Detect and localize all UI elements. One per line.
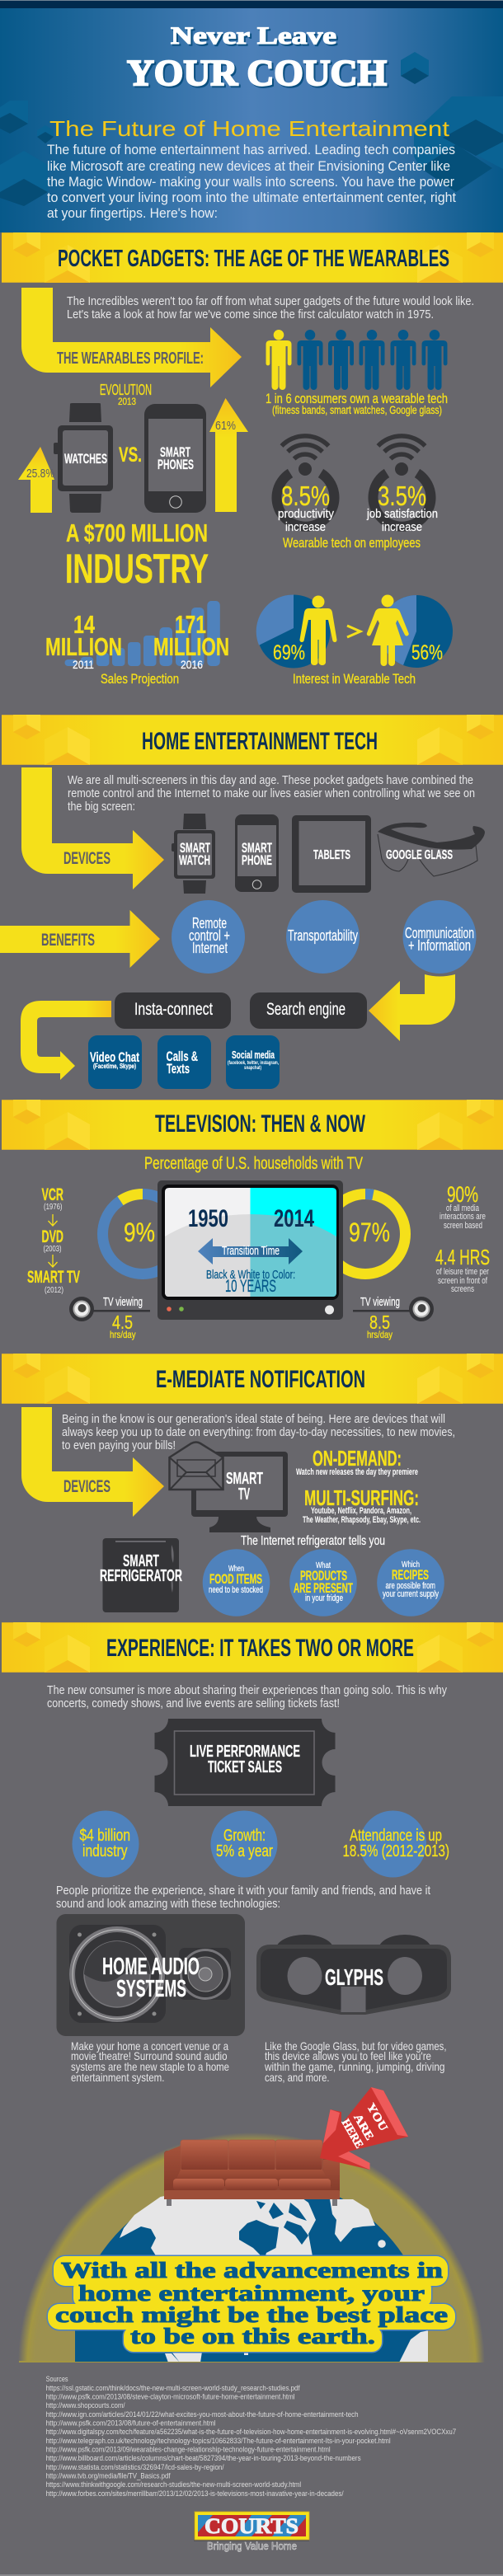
timeline: vcr dvd smart tv: (1976) (44, 1203, 63, 1212)
stat: 90% screen based: screen based (444, 1221, 482, 1231)
intro text: the Magic Window- making your walls into screens. You have the power (47, 174, 454, 190)
icon: smart tv monitor (191, 1452, 288, 1532)
circle: food items (203, 1549, 270, 1616)
timeline: vcr dvd smart tv: (2012) (45, 1286, 63, 1295)
icon: ticket: TICKET SALES (208, 1758, 282, 1776)
stat: 1 in 6 consumers (266, 391, 448, 416)
callout: best place on earth: With all the advancements in (61, 2258, 443, 2283)
text: new consumer: concerts, comedy shows, and live events are selling tickets fast! (47, 1696, 340, 1710)
label: evolution 2013: 2013 (118, 396, 136, 407)
section heading: home entertainment tech: HOME ENTERTAINMENT TECH (142, 728, 378, 755)
label: black and white to color: Black & White to Color: (206, 1268, 295, 1282)
stat: tv viewing 4.5 hrs: 4.5 (112, 1311, 133, 1333)
text: sources: http://www.billboard.com/articles/columns/chart-beat/5827394/the-year-in-touring-2013-beyond-the-numbers (46, 2454, 361, 2463)
arrow: you are here: YOU (364, 2101, 389, 2133)
stat: 90% screen based (440, 1182, 486, 1231)
stat: tv viewing 8.5 hrs: 8.5 (369, 1311, 390, 1333)
panel: header (0, 0, 503, 232)
circle: food items: need to be stocked (209, 1585, 263, 1595)
stat: tv viewing 4.5 hrs: TV viewing (103, 1295, 143, 1309)
circle: food items: FOOD ITEMS (209, 1571, 262, 1587)
icon: wifi job satisfaction 3.5%: 3.5% (378, 481, 426, 511)
text: multi-screeners: the big screen: (68, 800, 135, 814)
bar chart: sales projection: 171 (175, 610, 206, 639)
arrow: 25.8% (18, 447, 54, 513)
bar chart: sales projection: Sales Projection (101, 671, 179, 687)
card: calls and texts (157, 1035, 211, 1089)
bar chart: sales projection: MILLION (45, 632, 122, 661)
timeline: vcr dvd smart tv: SMART TV (27, 1268, 80, 1287)
icon: watch (54, 403, 113, 513)
headline: 700 million industry (65, 518, 209, 592)
arrow: 25.8%: 25.8% (26, 467, 54, 481)
circle: remote control + internet: Internet (192, 940, 228, 956)
intro text: The future of home entertainment has arrived. Leading tech companies (47, 142, 455, 157)
icon: tablet: TABLETS (313, 848, 350, 862)
icon: wifi productivity 8.5%: 8.5% (281, 481, 330, 511)
card: social media: Social media (232, 1049, 275, 1061)
icon: home audio speakers (56, 1914, 245, 2036)
bar chart: sales projection: MILLION (153, 632, 229, 661)
text: being in the know: to even paying your bills! (62, 1438, 176, 1452)
icon: wifi job satisfaction 3.5% (366, 436, 438, 534)
card: video chat: Video Chat (90, 1049, 139, 1065)
icon: smart tv monitor: TV (238, 1485, 250, 1504)
text: sources: http://www.statista.com/statistics/326947/lcd-sales-by-region/ (46, 2463, 224, 2472)
stat: tv viewing 4.5 hrs: hrs/day (110, 1329, 135, 1340)
text: sources: http://www.tvb.org/media/file/TV_Basics.pdf (46, 2471, 171, 2481)
card: social media: snapchat) (244, 1066, 261, 1071)
icon: wifi job satisfaction 3.5%: increase (382, 520, 422, 534)
text: sources: http://www.telegraph.co.uk/technology/technology-topics/10662833/The-future-of-entertainment-Its-in-your-pocket.html (46, 2437, 391, 2446)
circle: recipes: are possible from (386, 1581, 435, 1591)
text: concert venue (71, 2039, 229, 2084)
logo: courts: Bringing Value Home (207, 2540, 297, 2552)
icon: smart refrigerator: REFRIGERATOR (100, 1567, 182, 1585)
stat: tv viewing 4.5 hrs (69, 1295, 150, 1340)
stat: 90% screen based: of all media (446, 1204, 480, 1213)
stat: 1 in 6 consumers: (fitness bands, smart watches, Google glass) (272, 403, 442, 416)
intro text: to convert your living room into the ultimate entertainment center, right (47, 190, 456, 205)
text: concert venue: entertainment system. (71, 2071, 165, 2084)
circle: 4 billion industry (73, 1810, 139, 1878)
text: sources: Sources (46, 2375, 68, 2384)
text: video games: cars, and more. (265, 2071, 330, 2084)
title (127, 22, 387, 93)
circle: transportability (286, 900, 360, 974)
text: sources: http://www.psfk.com/2013/08/future-of-entertainment.html (46, 2419, 216, 2428)
circle: products are present: ARE PRESENT (294, 1580, 353, 1596)
icon: smartphone (144, 404, 206, 513)
stat: tv viewing 8.5 hrs (353, 1295, 434, 1340)
circle: transportability: Transportability (288, 927, 358, 944)
card: social media: (facebook, twitter, instagram, (228, 1061, 279, 1066)
circle: growth: 5% a year (216, 1842, 273, 1860)
donut chart: 9% in 1950: 9% (124, 1218, 155, 1247)
text: on-demand: ON-DEMAND: (313, 1446, 402, 1471)
icon: wifi productivity 8.5%: productivity (278, 507, 334, 521)
text: being in the know (62, 1412, 455, 1452)
bar chart: sales projection: 14 (73, 610, 96, 639)
circle: communication + information: + Information (408, 937, 471, 954)
icon: smart tv monitor: SMART (226, 1470, 263, 1488)
text: new consumer (47, 1683, 447, 1710)
logo: courts (194, 2512, 309, 2552)
section heading: experience (2, 1622, 503, 1673)
donut chart: 9% in 1950 (102, 1194, 183, 1274)
headline: 700 million industry: A $700 MILLION (66, 518, 208, 547)
arrow: you are here: ARE (350, 2112, 375, 2142)
icon: home audio speakers: SYSTEMS (116, 1976, 186, 2002)
timeline: vcr dvd smart tv: (2003) (43, 1245, 61, 1254)
icon: smart refrigerator: SMART (123, 1552, 159, 1570)
section heading: television then and now: TELEVISION: THEN & NOW (155, 1110, 365, 1138)
icon: home audio speakers: HOME AUDIO (102, 1954, 200, 1980)
arrow: insta-connect to apps (21, 1001, 111, 1080)
icon: wifi productivity 8.5% (277, 436, 335, 534)
circle: food items: When (228, 1565, 244, 1574)
icon: smart phone (235, 814, 279, 892)
icon: smart watch: SMART (180, 840, 210, 856)
caption: interest in wearable tech: Interest in Wearable Tech (293, 671, 416, 687)
section heading: pocket gadgets (2, 232, 503, 283)
icon: ticket (155, 1719, 335, 1806)
circle: products are present: What (316, 1561, 331, 1570)
arrow: wearables profile: THE WEARABLES PROFILE: (57, 350, 204, 368)
text: video games: this device allows you to feel like you're (265, 2049, 431, 2062)
text: people prioritize: sound and look amazing with these technologies: (56, 1897, 280, 1911)
section heading: e-mediate notification: E-MEDIATE NOTIFICATION (156, 1366, 365, 1393)
caption: wearable tech on employees: Wearable tech on employees (283, 535, 421, 551)
text: sources: http://www.ign.com/articles/2014/01/22/what-excites-you-most-about-the-future-of-home-entertainment-tech (46, 2410, 359, 2419)
globe (75, 2196, 428, 2362)
circle: recipes: Which (402, 1560, 420, 1570)
circle: attendance (343, 1810, 449, 1878)
callout: best place on earth: home entertainment, your (78, 2281, 425, 2306)
circle: 4 billion industry: industry (82, 1842, 127, 1860)
callout: best place on earth (48, 2256, 455, 2352)
pie chart: women 56%: 56% (411, 641, 443, 664)
card: social media (226, 1035, 280, 1089)
icon: google glass: GOOGLE GLASS (386, 848, 453, 862)
text: multi-screeners (68, 774, 475, 814)
icon: wifi productivity 8.5%: increase (285, 520, 326, 534)
text: people prioritize (56, 1884, 431, 1911)
text: multi-surfing: Youtube, Netflix, Pandora, Amazon, (311, 1506, 411, 1516)
box: insta-connect (115, 992, 231, 1029)
timeline: vcr dvd smart tv (27, 1185, 80, 1295)
icon: watch: WATCHES (64, 451, 107, 467)
section heading: television then and now (2, 1100, 503, 1150)
symbol: greater than (347, 626, 360, 637)
icon row: 1 in 6 people (266, 330, 447, 390)
circle: attendance: Attendance is up (350, 1827, 442, 1845)
box: search engine (250, 992, 367, 1029)
box: search engine: Search engine (266, 1000, 346, 1019)
circle: products are present: PRODUCTS (300, 1568, 347, 1584)
stat: 90% screen based: 90% (447, 1182, 478, 1207)
stat: tv viewing 8.5 hrs: hrs/day (367, 1329, 393, 1340)
pie chart: men 69% (256, 594, 337, 668)
text: video games: within the game, running, jumping, driving (264, 2060, 445, 2073)
section heading: home entertainment tech (2, 715, 503, 765)
icon: smart refrigerator (100, 1538, 182, 1612)
pie chart: men 69%: 69% (273, 641, 305, 664)
icon: ticket: LIVE PERFORMANCE (190, 1743, 300, 1761)
text: sources: http://www.psfk.com/2013/09/wearables-change-relationship-technology-future-entertainment.html (46, 2445, 331, 2455)
card: calls and texts: Calls & (167, 1049, 198, 1064)
arrow: communication to search engine (369, 974, 455, 1041)
arrow: you are here: HERE (339, 2118, 365, 2151)
box: insta-connect: Insta-connect (134, 1000, 213, 1019)
text: incredibles intro: Let's take a look at how far we've come since the first calculator watch in 1975. (67, 308, 434, 321)
title: Never Leave (171, 22, 336, 49)
label: evolution 2013: EVOLUTION (100, 382, 152, 398)
icon: google glass (378, 823, 485, 876)
callout: best place on earth: couch might be the best place (55, 2302, 448, 2327)
circle: growth: Growth: (223, 1827, 266, 1845)
circle: 4 billion industry: $4 billion (79, 1827, 130, 1845)
icon: glyphs headset: GLYPHS (325, 1964, 383, 1990)
arrow: 61%: 61% (215, 419, 236, 433)
arrow: benefits: BENEFITS (41, 931, 95, 950)
glow behind globe (19, 2133, 483, 2363)
circle: recipes: RECIPES (392, 1567, 429, 1583)
bar chart: sales projection: 2016 (181, 658, 203, 671)
text: sources (46, 2375, 456, 2499)
text: people prioritize: People prioritize the experience, share it with your family and friends, and have it (56, 1884, 431, 1898)
card: calls and texts: Texts (167, 1061, 190, 1077)
arrow: wearables profile (21, 288, 242, 387)
text: sources: https://ssl.gstatic.com/think/docs/the-new-multi-screen-world-study_research-studies.pdf (46, 2384, 300, 2393)
title: YOUR COUCH (127, 53, 387, 93)
text: being in the know: Being in the know is our generation's ideal state of being. Here are devices that will (62, 1412, 445, 1426)
circle: growth (211, 1810, 277, 1878)
text: on-demand: Watch new releases the day they premiere (296, 1467, 418, 1477)
card: video chat: (Facetime, Skype) (93, 1063, 136, 1070)
text: multi-surfing: The Weather, Rhapsody, Ebay, Skype, etc. (303, 1515, 421, 1525)
label: evolution 2013 (100, 382, 152, 407)
bottom edge (0, 2574, 503, 2576)
text: sources: http://www.forbes.com/sites/merrillbarr/2013/12/02/2013-is-televisions-most-inavative-year-in-decades/ (46, 2489, 344, 2499)
stat: 4.4 hrs leisure (435, 1245, 490, 1294)
icon: smart watch (172, 814, 215, 894)
circle: remote control + internet (172, 900, 245, 974)
arrow: transition time (198, 1238, 303, 1265)
circle: recipes (377, 1549, 444, 1616)
arrow: devices (21, 1407, 164, 1517)
circle: remote control + internet: Remote (192, 915, 227, 931)
text: concert venue: movie theatre! Surround sound audio (71, 2049, 228, 2062)
icon: smartphone: PHONES (157, 457, 194, 472)
icon: wifi job satisfaction 3.5%: job satisfaction (366, 507, 438, 521)
bar chart: sales projection (45, 601, 229, 687)
card: video chat (88, 1035, 142, 1089)
tv set (157, 1180, 343, 1320)
text: concert venue: systems are the new staple to a home (71, 2060, 229, 2073)
text: sources: https://www.thinkwithgoogle.com/research-studies/the-new-multi-screen-world-study.html (46, 2480, 301, 2489)
arrow: 61% (209, 398, 248, 512)
intro text (47, 142, 456, 221)
arrow: you are here (320, 2087, 408, 2170)
section heading: e-mediate notification (2, 1354, 503, 1404)
arrow: devices: DEVICES (63, 849, 110, 868)
subtitle: The Future of Home Entertainment (49, 116, 450, 141)
callout: best place on earth: to be on this earth. (130, 2324, 375, 2348)
pie chart: women 56% (367, 595, 453, 668)
arrow: transition time: Transition Time (222, 1244, 280, 1258)
stat: 1 in 6 consumers: 1 in 6 consumers own a wearable tech (266, 391, 448, 406)
bar chart: sales projection: 2011 (73, 658, 94, 671)
label: internet refrigerator: The Internet refrigerator tells you (241, 1534, 385, 1548)
stat: tv viewing 8.5 hrs: TV viewing (360, 1295, 400, 1309)
donut chart: 97% in 2014: 97% (349, 1218, 390, 1247)
logo: courts: COURTS (204, 2514, 299, 2538)
icon: smart phone: PHONE (242, 852, 272, 868)
icon: smartphone: SMART (160, 444, 190, 460)
text: video games (264, 2039, 447, 2084)
circle: recipes: your current supply (383, 1589, 439, 1599)
circle: communication + information (402, 900, 477, 974)
stat: 4.4 hrs leisure: screens (451, 1284, 474, 1294)
text: multi-surfing: MULTI-SURFING: (304, 1485, 419, 1510)
intro text: at your fingertips. Here's how: (47, 205, 218, 221)
tv set: 2014 (274, 1205, 314, 1232)
timeline: vcr dvd smart tv: VCR (41, 1185, 63, 1204)
label: versus: VS. (119, 443, 142, 467)
text: multi-surfing (303, 1485, 421, 1525)
icon: glyphs headset (256, 1935, 451, 2015)
icon: smart watch: WATCH (179, 852, 210, 868)
icon: smart phone: SMART (242, 840, 272, 856)
label: black and white to color (206, 1268, 295, 1296)
timeline: vcr dvd smart tv: DVD (41, 1227, 63, 1246)
arrow: devices: DEVICES (63, 1477, 110, 1496)
label: black and white to color: 10 YEARS (225, 1277, 276, 1296)
intro text: like Microsoft are creating new devices at their Envisioning Center like (47, 158, 450, 174)
stat: 90% screen based: interactions are (440, 1212, 486, 1222)
text: concert venue: Make your home a concert venue or a (71, 2039, 228, 2053)
headline: 700 million industry: INDUSTRY (65, 546, 209, 592)
icon: envelope (170, 1443, 223, 1490)
icon: tablet (292, 815, 371, 893)
chart title: percentage of households with tv: Percentage of U.S. households with TV (144, 1154, 363, 1173)
text: video games: Like the Google Glass, but for video games, (265, 2039, 447, 2053)
donut chart: 97% in 2014 (325, 1194, 406, 1274)
text: sources: http://www.psfk.com/2013/08/steve-clayton-microsoft-future-home-entertainment.html (46, 2392, 295, 2402)
circle: products are present (289, 1549, 357, 1616)
text: on-demand (296, 1446, 418, 1477)
circle: attendance: 18.5% (2012-2013) (343, 1842, 449, 1860)
tv set: 1950 (188, 1205, 228, 1232)
circle: products are present: in your fridge (305, 1593, 343, 1603)
circle: remote control + internet: control + (189, 927, 230, 944)
arrow: benefits (0, 910, 160, 968)
text: sources: http://www.shopcourts.com/ (46, 2401, 125, 2410)
icon: couch (164, 2140, 340, 2206)
arrow: devices (21, 767, 164, 889)
text: incredibles intro (67, 295, 474, 321)
